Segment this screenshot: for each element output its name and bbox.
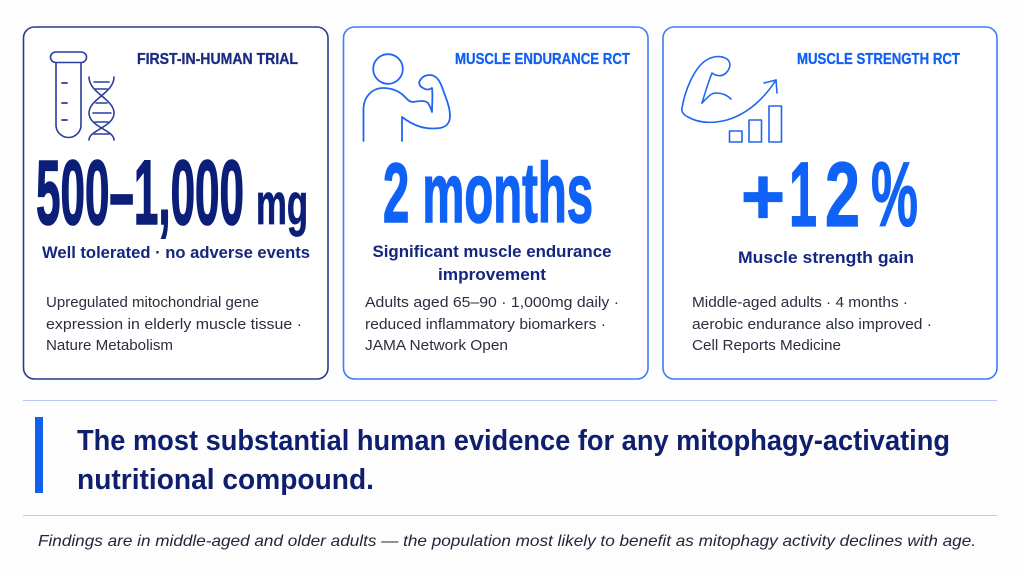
subheading (372, 242, 612, 284)
big stat unit: mg (256, 172, 308, 237)
panel: muscle endurance RCT (344, 27, 648, 379)
accent bar (35, 417, 43, 493)
subheading: improvement (438, 265, 546, 284)
card label: MUSCLE ENDURANCE RCT (455, 51, 630, 68)
key takeaway statement: nutritional compound. (77, 464, 374, 496)
description (46, 295, 302, 354)
icon: flexing person (364, 54, 450, 141)
big stat: + (741, 152, 785, 241)
card label: FIRST-IN-HUMAN TRIAL (137, 51, 298, 68)
description: aerobic endurance also improved · (692, 317, 932, 333)
big stat: % (871, 144, 918, 246)
description (692, 295, 932, 354)
panel: muscle strength RCT (663, 27, 997, 379)
description: JAMA Network Open (365, 338, 508, 354)
big stat: 1 (789, 144, 817, 246)
description: Cell Reports Medicine (692, 338, 841, 354)
subheading: Significant muscle endurance (372, 242, 612, 261)
big stat: 2 (825, 144, 860, 246)
description: Nature Metabolism (46, 338, 173, 354)
description: reduced inflammatory biomarkers · (365, 317, 606, 333)
key takeaway statement: The most substantial human evidence for any mitophagy-activating (77, 425, 950, 457)
subheading: Muscle strength gain (738, 248, 914, 267)
panel: first-in-human trial: 500–1,000 (36, 142, 244, 244)
key takeaway statement (77, 425, 950, 496)
card label: MUSCLE STRENGTH RCT (797, 51, 960, 68)
subheading: Well tolerated · no adverse events (42, 243, 310, 262)
panel: first-in-human trial (24, 27, 328, 379)
icon: test tube and DNA (50, 52, 114, 140)
big stat: 2 months (383, 146, 593, 240)
description: expression in elderly muscle tissue · (46, 317, 302, 333)
description: Middle-aged adults · 4 months · (692, 295, 908, 311)
description: Upregulated mitochondrial gene (46, 295, 259, 311)
big stat (741, 144, 918, 246)
icon: arm with growth chart (682, 57, 782, 142)
description (365, 295, 619, 354)
description: Adults aged 65–90 · 1,000mg daily · (365, 295, 619, 311)
footnote: Findings are in middle-aged and older adults — the population most likely to benefit as mitophagy activity declines with age. (38, 533, 976, 550)
